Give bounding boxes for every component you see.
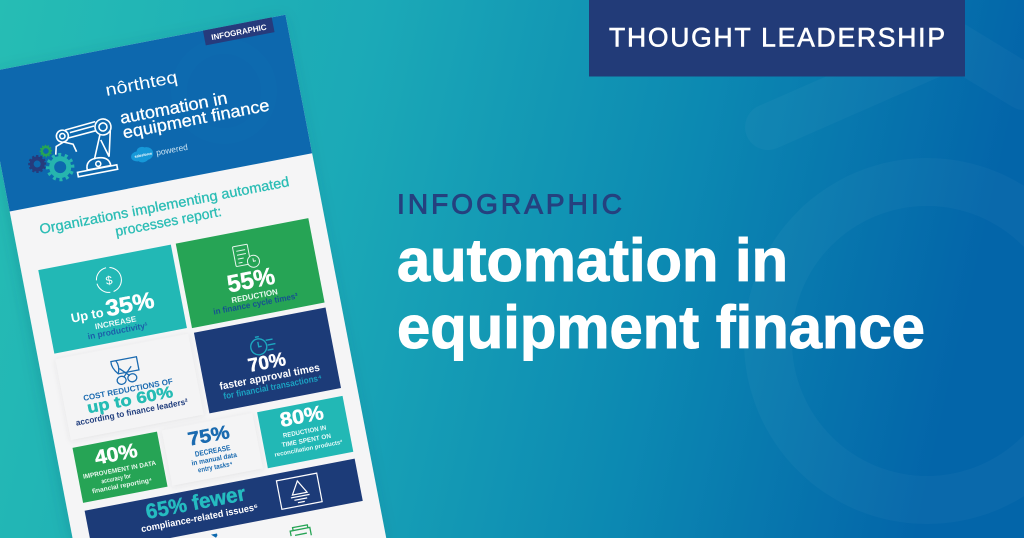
logo: salesforce powered: salesforce — [134, 152, 152, 159]
icon: monitor with warning — [276, 473, 322, 509]
stat text: faster approval times — [218, 362, 321, 393]
stat text: 55% — [225, 263, 277, 298]
section heading: processes report: — [114, 203, 223, 239]
panel: 40% data accuracy — [72, 432, 168, 503]
stat text: up to 60% — [86, 384, 174, 417]
panel: 75% decrease in manual data entry — [162, 413, 263, 486]
stat text: for financial transactions⁴ — [223, 373, 323, 401]
panel: 60% cost reductions — [55, 334, 204, 440]
panel: next row blue block — [211, 534, 217, 538]
panel: 65% fewer compliance issues: compliance-related issues⁶ — [140, 502, 259, 535]
panel: 75% decrease in manual data entry: 75% — [186, 422, 232, 451]
panel: 70% faster approval times — [194, 307, 341, 413]
rotated infographic document — [0, 15, 386, 538]
icon: stopwatch with flame — [249, 334, 277, 356]
stat text — [215, 343, 323, 402]
tag: infographic: INFOGRAPHIC — [211, 23, 267, 42]
panel: 75% decrease in manual data entry: in manual data — [191, 452, 238, 468]
main title: automation in — [397, 227, 788, 294]
icon: green document stack — [290, 524, 311, 538]
logo: northeq: nôrthteq — [104, 68, 179, 100]
document page — [0, 15, 386, 538]
stat text: REDUCTION — [231, 287, 279, 305]
panel: 40% data accuracy: accuracy for — [101, 473, 132, 485]
stat text: Up to — [70, 305, 105, 326]
panel: 80% reduction in reconciliation: 80% — [278, 402, 326, 432]
watermark: logo ring — [744, 158, 1024, 524]
stat text: 70% — [246, 349, 288, 377]
panel: 80% reduction in reconciliation: TIME SPENT ON — [281, 433, 332, 449]
panel: 40% data accuracy: financial reporting⁴ — [92, 477, 153, 495]
section heading: Organizations implementing automated — [38, 173, 290, 237]
panel: 65% fewer compliance issues — [85, 459, 363, 538]
tag: infographic — [203, 17, 275, 45]
badge: thought leadership: THOUGHT LEADERSHIP — [609, 22, 945, 52]
icon: robot arm — [51, 118, 119, 180]
panel: 55% reduction in finance cycle times — [176, 218, 325, 328]
icon: checklist and clock — [232, 242, 261, 271]
icon: dollar cycle: $ — [104, 273, 114, 288]
stat text: 35% — [103, 287, 156, 321]
stat text — [68, 287, 159, 344]
eyebrow: infographic: INFOGRAPHIC — [397, 188, 622, 220]
panel: 80% reduction in reconciliation — [257, 396, 353, 468]
stat text: according to finance leaders² — [75, 396, 189, 428]
document title: automation in — [118, 88, 229, 128]
icon: gears — [26, 141, 75, 185]
panel: 75% decrease in manual data entry: entry tasks⁴ — [197, 461, 234, 474]
stat text: in productivity¹ — [87, 320, 149, 341]
panel: 40% data accuracy: 40% — [93, 440, 140, 470]
icon: scissors cutting paper — [111, 357, 141, 386]
document title — [118, 81, 271, 142]
main title: equipment finance — [397, 294, 925, 361]
document header — [0, 15, 312, 211]
stat text — [71, 375, 189, 428]
panel: 75% decrease in manual data entry: DECREASE — [194, 443, 231, 459]
watermark: chevron stroke — [768, 45, 1024, 127]
panel: 65% fewer compliance issues: 65% fewer — [144, 482, 247, 524]
main title — [397, 227, 925, 361]
stat text: COST REDUCTIONS OF — [82, 377, 174, 403]
stat text — [206, 259, 299, 317]
icon: dollar cycle — [94, 265, 124, 295]
panel: 80% reduction in reconciliation: REDUCTION IN — [282, 424, 327, 440]
panel: 35% increase in productivity — [38, 245, 187, 354]
stat text: in finance cycle times³ — [212, 291, 299, 317]
logo: salesforce powered: powered — [155, 142, 189, 158]
panel: 40% data accuracy: IMPROVEMENT IN DATA — [83, 460, 157, 481]
badge: thought leadership — [589, 0, 965, 76]
panel: 80% reduction in reconciliation: reconciliation products² — [274, 439, 343, 459]
document title: equipment finance — [121, 96, 271, 142]
logo: salesforce powered — [130, 138, 189, 164]
stat text: INCREASE — [94, 314, 138, 331]
